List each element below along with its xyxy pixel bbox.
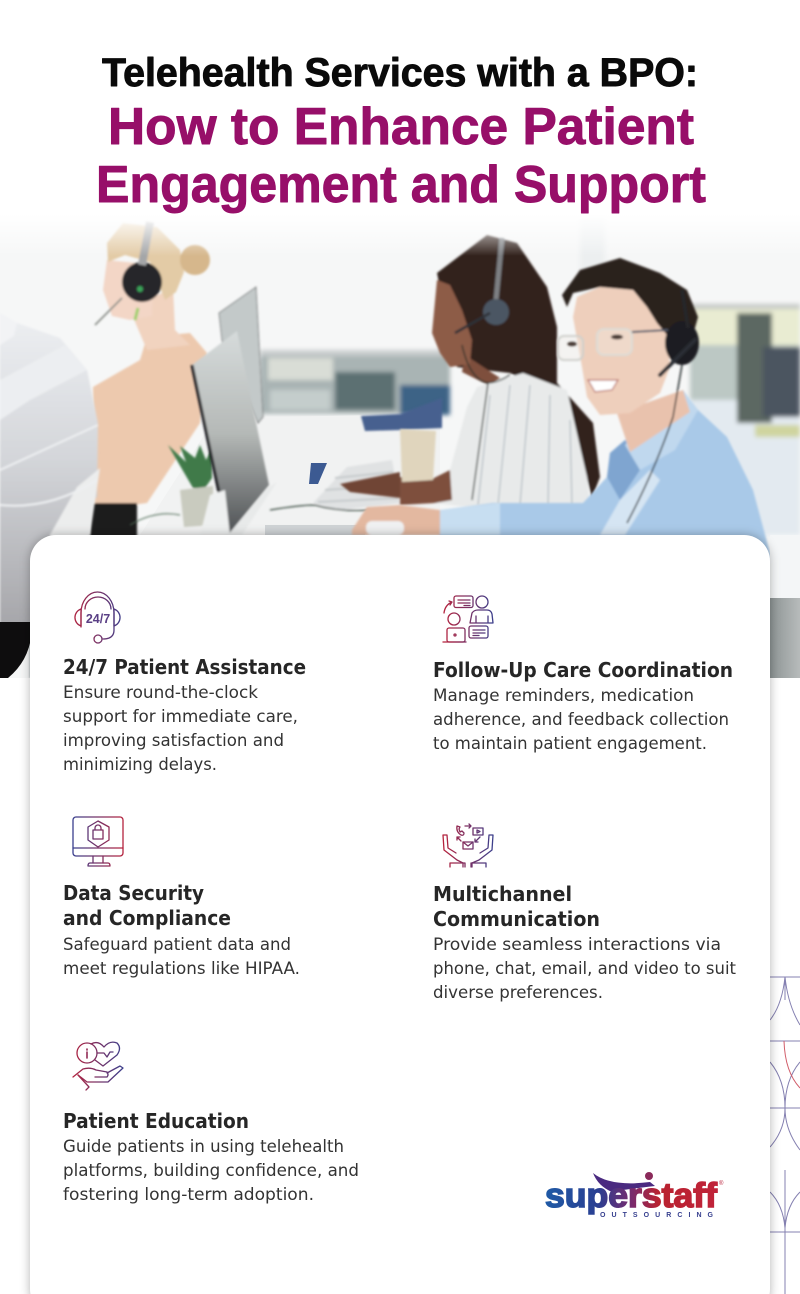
photo: call center agents with headsets [0,214,800,678]
block: 24/7 Patient Assistance: improving satisfaction and [63,731,284,750]
dark trousers at left edge [0,622,32,678]
block: Follow-Up Care Coordination [433,658,733,753]
block: 24/7 Patient Assistance: minimizing delays. [63,755,217,774]
block: Patient Education: Guide patients in using telehealth [63,1137,344,1156]
block: Follow-Up Care Coordination: Manage reminders, medication [433,686,694,705]
decorative line pattern [770,977,800,1294]
block: Multichannel Communication: diverse preferences. [433,983,603,1002]
title: How to Enhance Patient [108,98,694,156]
icon: hand holding heart with info [73,1042,123,1090]
white content card [30,535,770,1294]
man in white shirt, left foreground [0,313,100,678]
logo: SuperStaff Outsourcing: superstaff [545,1177,718,1215]
icon: 24/7 headset [75,592,120,643]
logo: SuperStaff Outsourcing: OUTSOURCING [600,1212,714,1219]
window view behind desks [260,215,800,535]
block: Data Security and Compliance: Safeguard patient data and [63,935,291,954]
smiling male agent [352,258,770,570]
block: Multichannel Communication: Multichannel [433,882,572,906]
right edge: white above grey desk [770,550,771,570]
block: Multichannel Communication: phone, chat, email, and video to suit [433,959,737,978]
back computer monitor [219,287,263,423]
block: 24/7 Patient Assistance: support for immediate care, [63,707,298,726]
block: Patient Education: platforms, building confidence, and [63,1161,359,1180]
plant in pot [168,445,214,527]
block: Patient Education [63,1109,359,1204]
keyboard and wires [130,460,400,525]
front computer monitor [192,331,277,535]
card shadow [30,535,770,1294]
block: Multichannel Communication: Provide seamless interactions via [433,935,721,954]
title: Engagement and Support [96,156,706,214]
block: 24/7 Patient Assistance: 24/7 Patient Assistance [63,655,306,679]
block: Follow-Up Care Coordination: to maintain patient engagement. [433,734,707,753]
title: Telehealth Services with a BPO: [102,51,698,95]
block: Patient Education: Patient Education [63,1109,249,1133]
block: Multichannel Communication [433,882,737,1002]
block: Data Security and Compliance [63,881,300,978]
blonde agent [90,222,210,537]
dark haired agent [340,235,600,507]
icon: monitor with security shield [73,817,123,866]
block: Follow-Up Care Coordination: adherence, and feedback collection [433,710,729,729]
block: Data Security and Compliance: Data Security [63,881,204,905]
logo: SuperStaff Outsourcing: ® [719,1180,724,1187]
block: Follow-Up Care Coordination: Follow-Up Care Coordination [433,658,733,682]
block: 24/7 Patient Assistance: Ensure round-the-clock [63,683,258,702]
icon: 24/7 headset: 24/7 [86,612,110,626]
icon: follow-up care people and chat [443,596,493,642]
title [96,51,706,214]
block: Data Security and Compliance: meet regulations like HIPAA. [63,959,300,978]
icon: hands with communication channels [443,824,493,867]
block: 24/7 Patient Assistance [63,655,306,774]
right edge grey desk [770,598,800,678]
block: Patient Education: fostering long-term adoption. [63,1185,314,1204]
desk surface [344,416,362,417]
top fade [0,214,800,256]
block: Multichannel Communication: Communication [433,907,600,931]
block: Data Security and Compliance: and Compliance [63,906,231,930]
